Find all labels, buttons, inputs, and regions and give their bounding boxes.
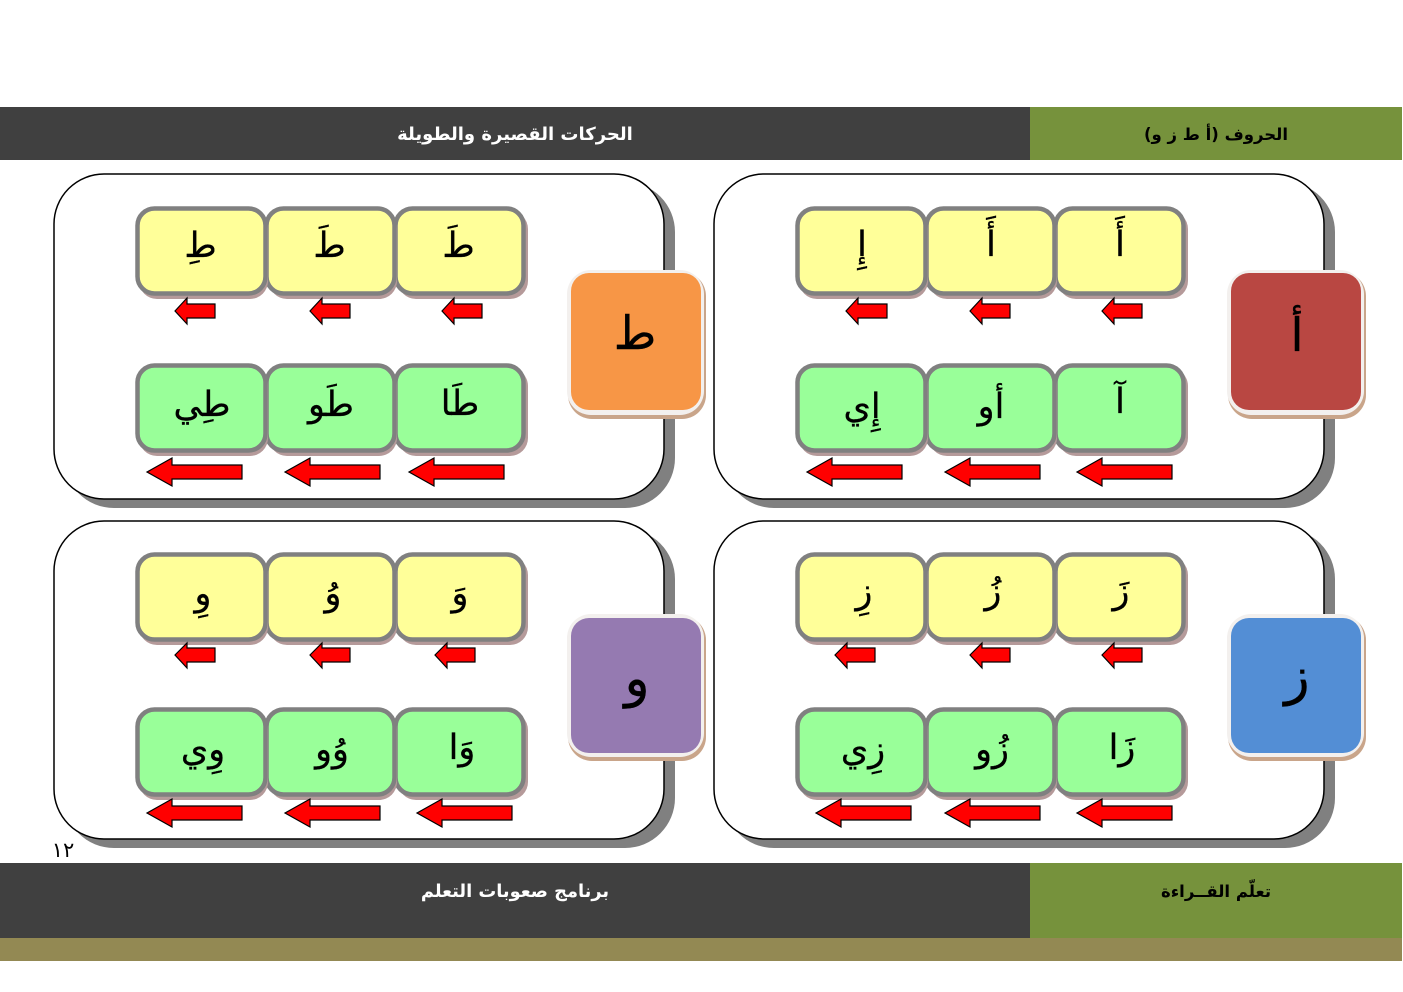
short vowel row [798,208,1188,299]
long vowel row: أو [976,383,1004,427]
footer text: programme name: برنامج صعوبات التعلم [421,881,609,902]
long vowel row: آ [1113,379,1127,422]
short vowel row: زَ [1111,572,1130,612]
long vowel row: طِي [173,385,231,425]
letter card: zay: ز [1281,647,1310,707]
heading: short and long vowels: الحركات القصيرة والطويلة [397,124,633,145]
long vowel row: وِي [181,730,225,775]
letter card: zay [1227,614,1366,761]
long vowel row: إِي [843,387,881,432]
short vowel row: أَ [1114,216,1125,265]
long vowel row: زَا [1109,728,1136,768]
long vowel row: وَا [449,728,475,768]
long vowel row [138,366,528,456]
arrows [147,643,512,827]
letter card: taa [567,270,706,419]
short vowel row: وِ [193,574,211,619]
short vowel row: طَ [442,224,475,266]
short vowel row: طَ [313,224,346,266]
short vowel row [798,554,1188,645]
short vowel row: إِ [856,225,867,270]
panel: letter taa [54,174,706,508]
panel: letter zay [714,521,1366,848]
short vowel row: وُ [323,574,341,614]
letter card: waw [567,614,706,761]
long vowel row: وُو [313,730,349,770]
footer bar [0,863,1402,961]
arrows [807,298,1172,486]
long vowel row [138,710,528,800]
page number: ١٢ [52,838,74,862]
footer text: learn reading: تعلّم القــراءة [1161,878,1271,902]
letter card: waw: و [621,649,650,709]
short vowel row: وَ [450,574,468,614]
long vowel row: طَو [306,383,354,425]
short vowel row: طِ [184,226,217,266]
long vowel row: طَا [441,382,479,424]
short vowel row [138,554,528,645]
letter card: taa: ط [614,306,656,360]
heading: letters: الحروف (أ ط ز و) [1144,124,1288,145]
panel: letter alif [714,174,1366,508]
long vowel row [798,710,1188,800]
long vowel row: زُو [973,730,1009,770]
long vowel row [798,366,1188,456]
short vowel row: أَ [985,216,996,265]
short vowel row: زِ [854,572,872,617]
arrows [816,643,1172,827]
header bar [0,107,1402,160]
short vowel row [138,208,528,299]
short vowel row: زُ [983,572,1002,612]
arrows [147,298,504,486]
letter card: alif: أ [1291,305,1303,362]
letter card: alif [1227,270,1366,419]
panel: letter waw [54,521,706,848]
long vowel row: زِي [841,730,885,775]
